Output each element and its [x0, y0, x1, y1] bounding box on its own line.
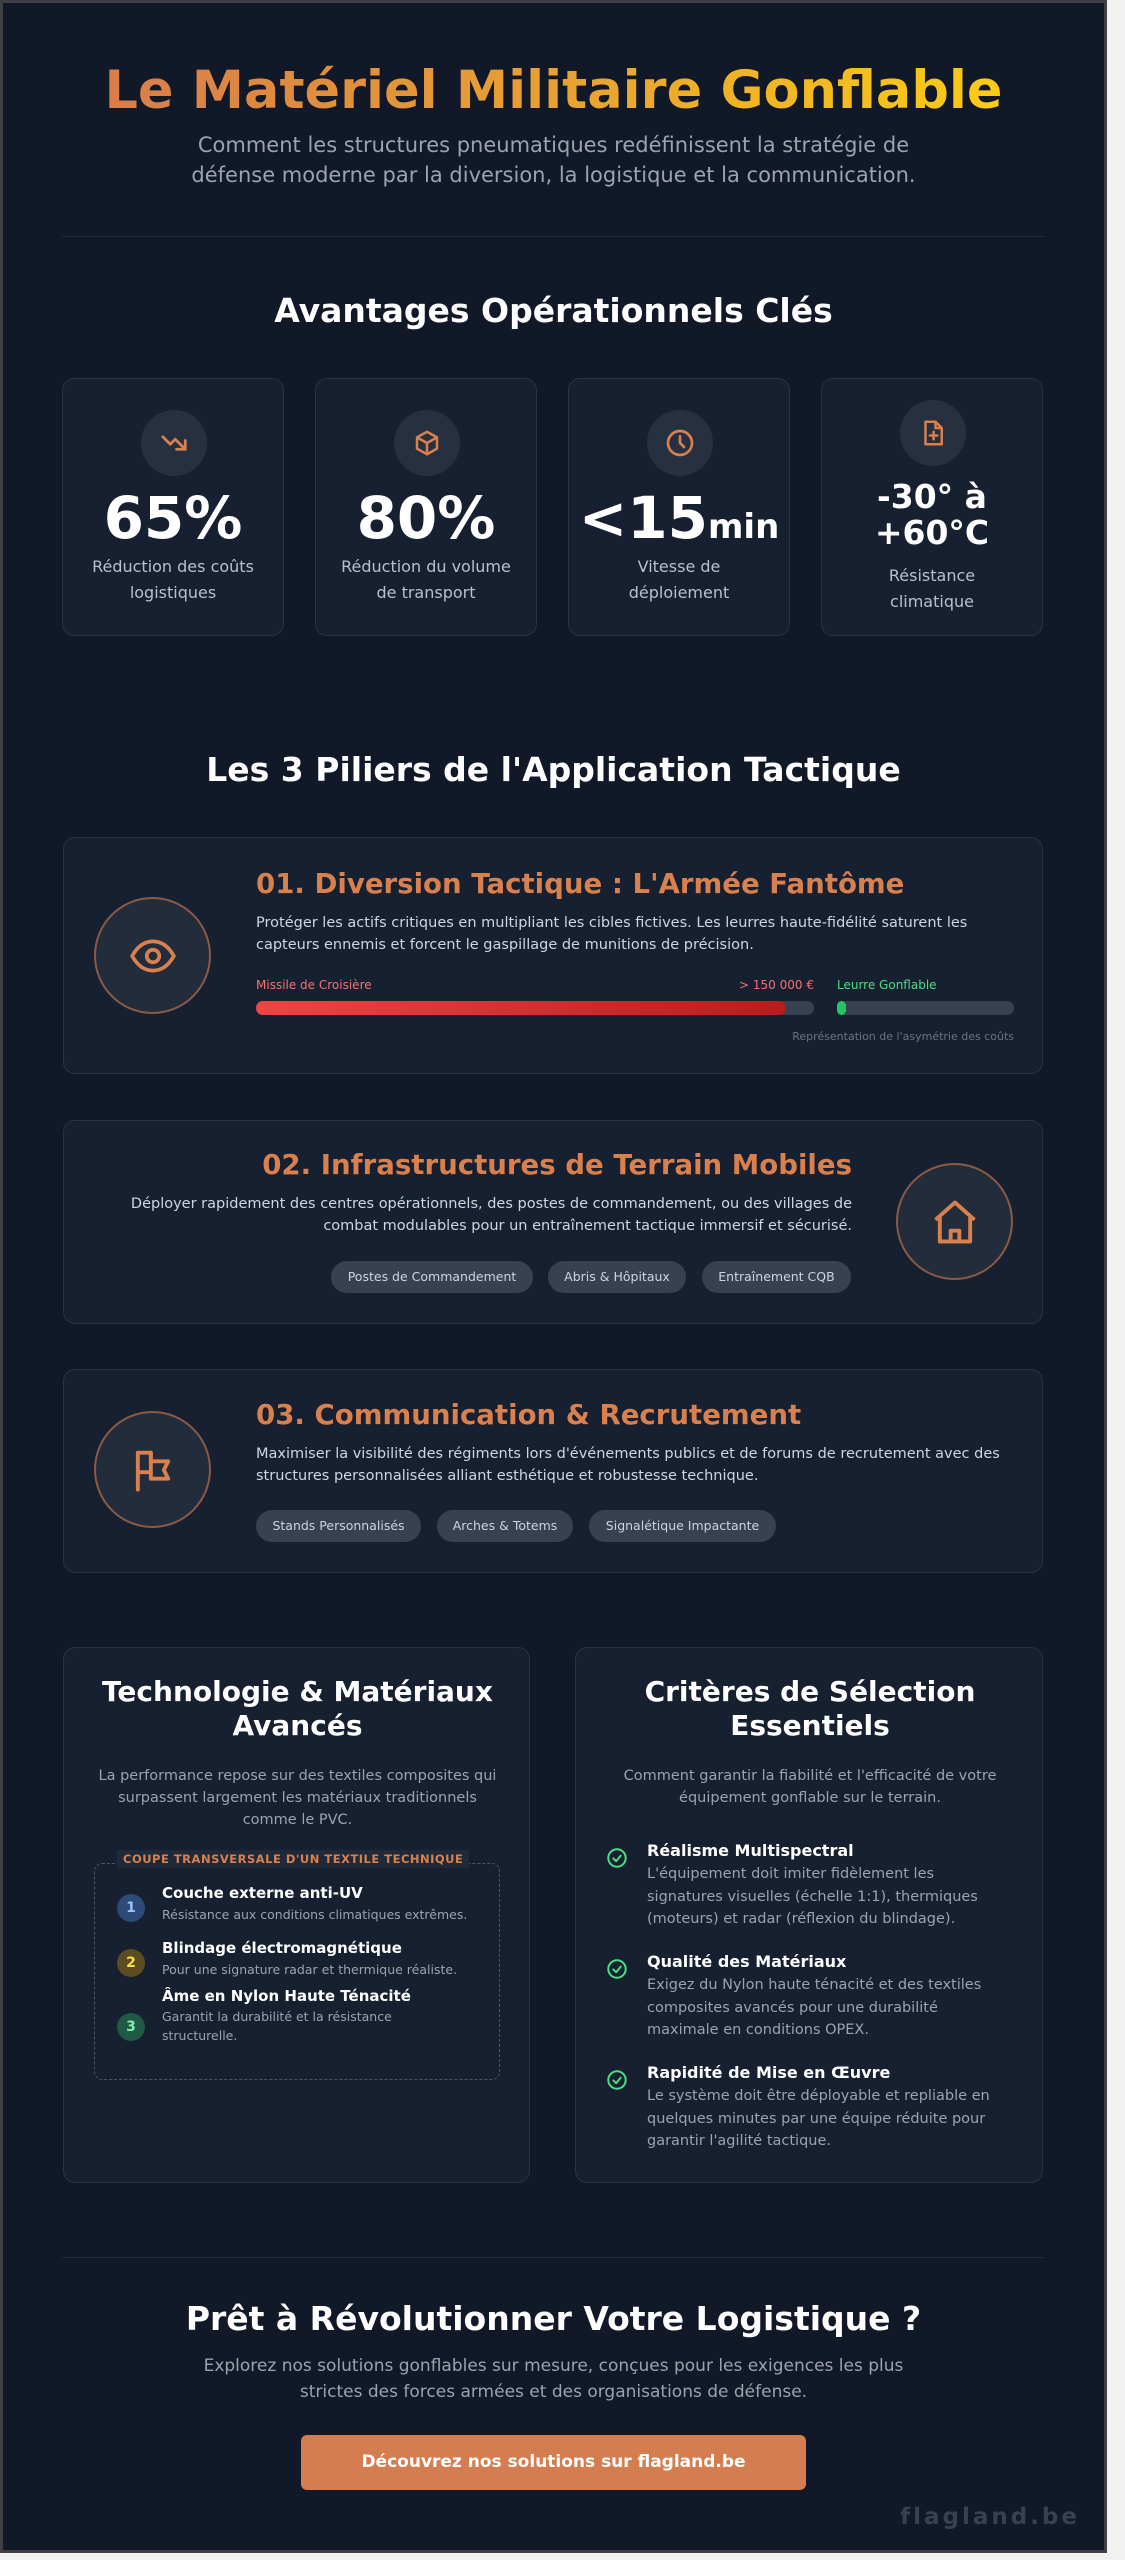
criterion 1: L'équipement doit imiter fidèlement les signatures visuelles (échelle 1:1), thermiques (moteurs) et radar (réflexion du blindage). — [647, 1866, 978, 1927]
layer 2: Pour une signature radar et thermique réaliste. — [162, 1962, 457, 1977]
tech description: La performance repose sur des textiles composites qui surpassent largement les matériaux traditionnels comme le PVC. — [99, 1768, 496, 1828]
label: déploiement — [629, 583, 729, 602]
stat temperature: -30° à — [877, 477, 987, 516]
label — [629, 557, 729, 602]
chart: cost asymmetry bars: Missile de Croisière — [256, 978, 372, 992]
icon: document plus — [900, 400, 966, 466]
criterion 3: Rapidité de Mise en Œuvre — [647, 2063, 890, 2082]
criterion 2: Qualité des Matériaux — [647, 1952, 846, 1971]
diagram: textile cross-section: Âme en Nylon Haute Ténacité — [162, 1987, 411, 2005]
tags: Signalétique Impactante — [606, 1518, 759, 1533]
label — [92, 557, 254, 602]
icon: house — [896, 1163, 1013, 1280]
stat 80%: 80% — [357, 484, 495, 552]
tags — [256, 1510, 776, 1542]
layer 2: 2 — [126, 1955, 136, 1971]
icon: trend down — [141, 410, 207, 476]
tech title: Technologie & Matériaux Avancés — [102, 1675, 493, 1742]
stat <15min: <15min — [579, 484, 779, 552]
tags — [331, 1261, 851, 1293]
icon: box — [394, 410, 460, 476]
watermark: flagland.be — [900, 2504, 1080, 2530]
criterion 2 — [607, 1952, 981, 2038]
layer 1: Résistance aux conditions climatiques extrêmes. — [162, 1907, 467, 1922]
chart: cost asymmetry bars — [256, 978, 1014, 1043]
label: Résistance — [889, 566, 975, 585]
tags: Entraînement CQB — [718, 1269, 835, 1284]
pillar 2 description: Déployer rapidement des centres opérationnels, des postes de commandement, ou des villages de combat modulables pour un entraînement tactique immersif et sécurisé. — [131, 1196, 852, 1234]
subtitle: Comment les structures pneumatiques redéfinissent la stratégie de défense moderne par la diversion, la logistique et la communication. — [191, 133, 916, 187]
panel: technologie — [63, 1647, 530, 2183]
diagram: textile cross-section — [94, 1863, 500, 2080]
heading: avantages: Avantages Opérationnels Clés — [274, 291, 833, 330]
stat temperature — [875, 477, 989, 552]
stat 65%: 65% — [104, 484, 242, 552]
stat card 2 — [315, 378, 537, 636]
layer 2: Blindage électromagnétique — [162, 1939, 402, 1957]
layer 2 — [117, 1939, 457, 1977]
CTA description: Explorez nos solutions gonflables sur mesure, conçues pour les exigences les plus strictes des forces armées et des organisations de défense. — [204, 2356, 903, 2402]
criterion 3: Le système doit être déployable et repliable en quelques minutes par une équipe réduite pour garantir l'agilité tactique. — [647, 2088, 990, 2149]
label: climatique — [890, 592, 974, 611]
CTA button — [301, 2435, 806, 2490]
CTA heading: Prêt à Révolutionner Votre Logistique ? — [186, 2299, 921, 2338]
layer 1 — [117, 1884, 467, 1922]
chart: cost asymmetry bars: Représentation de l'asymétrie des coûts — [792, 1030, 1014, 1043]
criterion 1 — [607, 1841, 978, 1927]
diagram label: COUPE TRANSVERSALE D'UN TEXTILE TECHNIQUE — [123, 1852, 463, 1866]
pillar 3 title: 03. Communication & Recrutement — [256, 1398, 801, 1431]
label: logistiques — [130, 583, 216, 602]
icon: clock — [647, 410, 713, 476]
pillar 1 title: 01. Diversion Tactique : L'Armée Fantôme — [256, 867, 904, 900]
panel: pillar 3 — [63, 1369, 1043, 1573]
stat card 1 — [62, 378, 284, 636]
label: Réduction des coûts — [92, 557, 254, 576]
criterion 1: Réalisme Multispectral — [647, 1841, 854, 1860]
criterion 2: Exigez du Nylon haute ténacité et des textiles composites avancés pour une durabilité maximale en conditions OPEX. — [647, 1977, 981, 2038]
icon: eye — [94, 897, 211, 1014]
label — [341, 557, 511, 602]
stat temperature: +60°C — [875, 513, 989, 552]
layer 1: 1 — [126, 1900, 136, 1916]
tags: Arches & Totems — [453, 1518, 557, 1533]
label: de transport — [376, 583, 476, 602]
tags: Abris & Hôpitaux — [564, 1269, 670, 1284]
tags: Stands Personnalisés — [272, 1518, 405, 1533]
tags: Postes de Commandement — [348, 1269, 516, 1284]
layer 1: Couche externe anti-UV — [162, 1884, 363, 1902]
chart: cost asymmetry bars: Leurre Gonflable — [837, 978, 937, 992]
label: Vitesse de — [638, 557, 720, 576]
layer 3: Garantit la durabilité et la résistance structurelle. — [162, 2009, 392, 2043]
chart: cost asymmetry bars: > 150 000 € — [739, 978, 814, 992]
panel: pillar 1 — [63, 837, 1043, 1074]
heading: piliers: Les 3 Piliers de l'Application Tactique — [206, 750, 901, 789]
criterion 3 — [607, 2063, 990, 2149]
layer 3: 3 — [126, 2019, 136, 2035]
criteria title: Critères de Sélection Essentiels — [645, 1675, 975, 1742]
label: Réduction du volume — [341, 557, 511, 576]
layer 3 — [117, 1987, 411, 2043]
stat card 3 — [568, 378, 790, 636]
pillar 1 description: Protéger les actifs critiques en multipliant les cibles fictives. Les leurres haute-fidélité saturent les capteurs ennemis et forcent le gaspillage de munitions de précision. — [256, 915, 967, 953]
CTA button: Découvrez nos solutions sur flagland.be — [361, 2452, 746, 2472]
label — [889, 566, 975, 611]
stat card 4 — [821, 378, 1043, 636]
panel: critères — [575, 1647, 1043, 2183]
icon: flag — [94, 1411, 211, 1528]
criteria description: Comment garantir la fiabilité et l'efficacité de votre équipement gonflable sur le terrain. — [624, 1768, 996, 1806]
pillar 3 description: Maximiser la visibilité des régiments lors d'événements publics et de forums de recrutement avec des structures personnalisées alliant esthétique et robustesse technique. — [256, 1446, 1000, 1484]
title: Le Matériel Militaire Gonflable — [104, 60, 1003, 121]
pillar 2 title: 02. Infrastructures de Terrain Mobiles — [262, 1148, 852, 1181]
panel: pillar 2 — [63, 1120, 1043, 1324]
